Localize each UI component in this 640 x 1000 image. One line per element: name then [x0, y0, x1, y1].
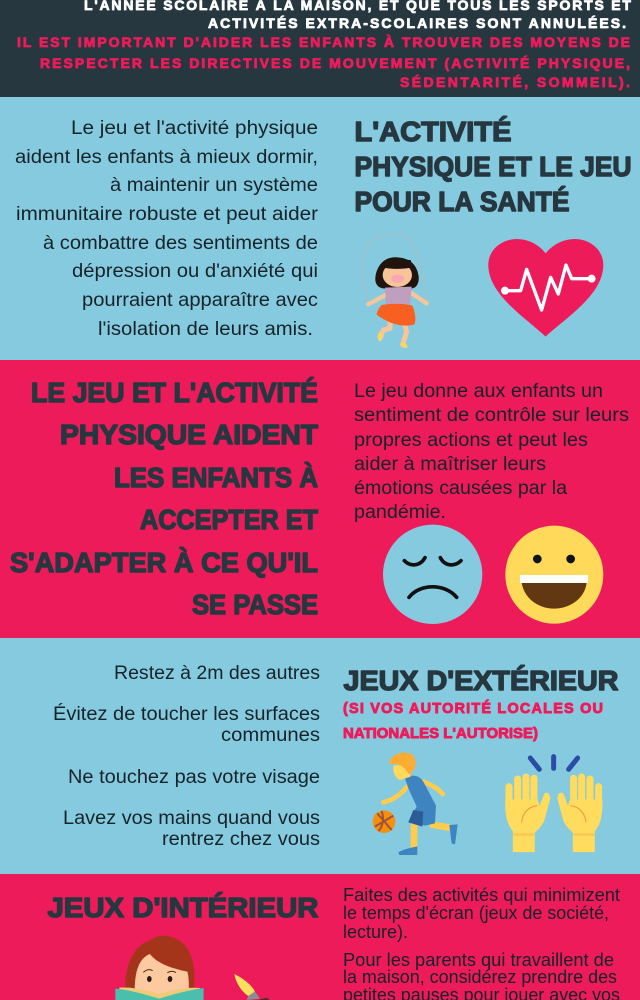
- emotions paragraph: aider à maîtriser leurs: [354, 454, 546, 475]
- intro text white: [84, 0, 631, 31]
- emotions paragraph: pandémie.: [354, 502, 446, 523]
- emotions heading: SE PASSE: [192, 589, 318, 620]
- emotions paragraph: sentiment de contrôle sur leurs: [354, 405, 629, 426]
- panel: health: [0, 97, 640, 360]
- emotions heading: PHYSIQUE AIDENT: [60, 419, 318, 450]
- outdoor tips: [53, 663, 320, 850]
- health paragraph: à combattre des sentiments de: [43, 233, 318, 254]
- outdoor subheading: (SI VOS AUTORITÉ LOCALES OU: [343, 700, 603, 717]
- icon: raised hands: [506, 757, 602, 852]
- icon: child reading a book: [115, 936, 204, 1000]
- panel: outdoor games: [0, 638, 640, 874]
- indoor paragraph: Pour les parents qui travaillent de: [343, 949, 614, 970]
- outdoor subheading: NATIONALES L'AUTORISE): [343, 726, 538, 742]
- panel: emotions: [0, 360, 640, 638]
- health paragraph: Le jeu et l'activité physique: [71, 118, 318, 139]
- right hand: [558, 777, 602, 852]
- health heading: L'ACTIVITÉ: [354, 116, 512, 147]
- emotions heading: S'ADAPTER À CE QU'IL: [10, 547, 318, 578]
- sparkle lines: [530, 757, 578, 769]
- intro text white: ACTIVITÉS EXTRA-SCOLAIRES SONT ANNULÉES.: [208, 15, 626, 31]
- intro text pink: SÉDENTARITÉ, SOMMEIL).: [400, 74, 630, 90]
- icon: heart with pulse: [488, 239, 603, 337]
- indoor paragraph: [343, 884, 620, 1000]
- left hand: [506, 777, 550, 852]
- emotions paragraph: émotions causées par la: [354, 478, 567, 499]
- health paragraph: [15, 118, 319, 340]
- health heading: POUR LA SANTÉ: [354, 186, 570, 217]
- emotions heading: ACCEPTER ET: [140, 504, 318, 535]
- health paragraph: immunitaire robuste et peut aider: [16, 204, 319, 225]
- health heading: PHYSIQUE ET LE JEU: [354, 151, 632, 182]
- icon: sad face: [383, 525, 482, 624]
- emotions heading: LE JEU ET L'ACTIVITÉ: [31, 377, 318, 408]
- health paragraph: aident les enfants à mieux dormir,: [15, 147, 318, 168]
- outdoor tips: Restez à 2m des autres: [114, 663, 320, 684]
- indoor paragraph: le temps d'écran (jeux de société,: [343, 902, 609, 923]
- outdoor tips: Ne touchez pas votre visage: [68, 767, 320, 788]
- health paragraph: pourraient apparaître avec: [82, 290, 318, 311]
- health paragraph: l'isolation de leurs amis.: [98, 319, 313, 340]
- icon: basketball player: [373, 753, 458, 855]
- panel: indoor games: [0, 874, 640, 1000]
- outdoor heading: JEUX D'EXTÉRIEUR: [344, 665, 619, 696]
- icon: laughing face: [505, 526, 603, 624]
- intro text pink: RESPECTER LES DIRECTIVES DE MOUVEMENT (ACTIVITÉ PHYSIQUE,: [40, 55, 630, 71]
- emotions paragraph: Le jeu donne aux enfants un: [354, 381, 603, 402]
- health paragraph: dépression ou d'anxiété qui: [72, 261, 318, 282]
- intro text pink: IL EST IMPORTANT D'AIDER LES ENFANTS À TROUVER DES MOYENS DE: [17, 34, 630, 50]
- indoor paragraph: la maison, considérez prendre des: [343, 966, 617, 987]
- indoor paragraph: lecture).: [343, 921, 408, 942]
- health paragraph: à maintenir un système: [110, 175, 318, 196]
- indoor paragraph: Faites des activités qui minimizent: [343, 884, 620, 905]
- health heading: [354, 116, 632, 217]
- emotions paragraph: propres actions et peut les: [354, 430, 588, 451]
- emotions paragraph: [354, 381, 629, 523]
- panel: intro header: [0, 0, 640, 97]
- indoor heading: JEUX D'INTÉRIEUR: [48, 892, 319, 923]
- icon: pencil: [234, 974, 270, 1000]
- emotions heading: LES ENFANTS À: [114, 462, 318, 493]
- intro text pink: [17, 34, 630, 90]
- outdoor subheading: [343, 700, 603, 742]
- outdoor tips: Évitez de toucher les surfaces: [53, 704, 320, 725]
- outdoor tips: Lavez vos mains quand vous: [63, 808, 320, 829]
- emotions heading: [10, 377, 318, 620]
- outdoor tips: communes: [221, 725, 320, 746]
- icon: girl skipping rope: [363, 234, 427, 349]
- outdoor tips: rentrez chez vous: [162, 829, 320, 850]
